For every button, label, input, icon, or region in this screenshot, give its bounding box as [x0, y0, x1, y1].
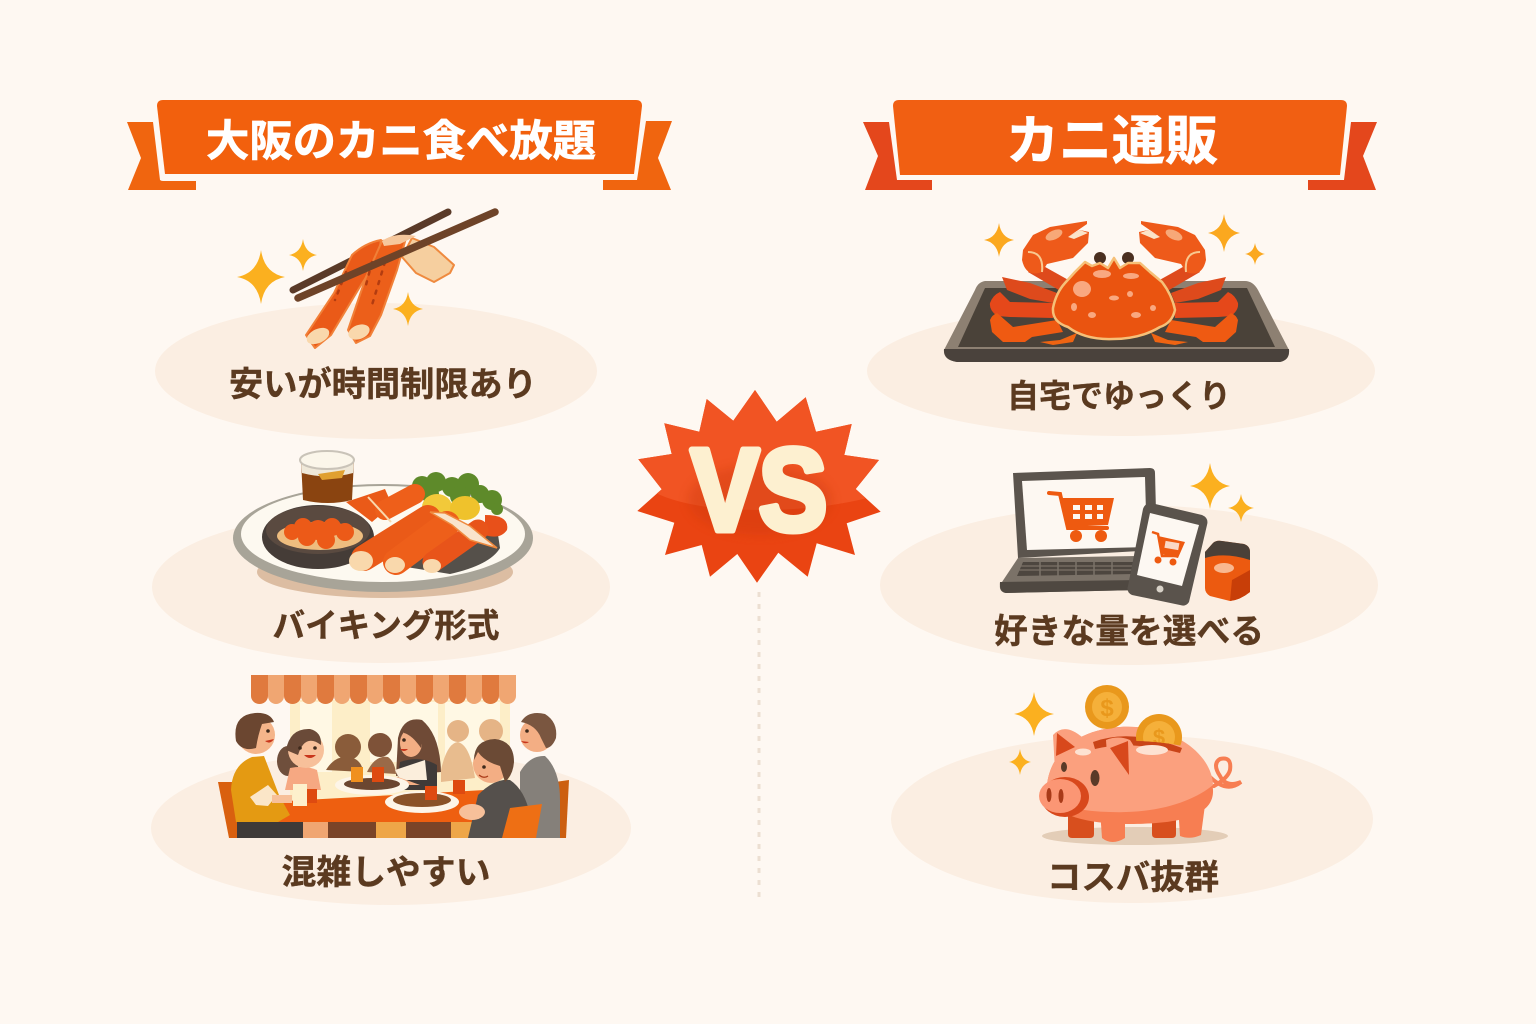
claw: [1022, 221, 1089, 274]
box: [1205, 541, 1250, 601]
icon: sparkles: [1190, 463, 1254, 522]
legs: [1068, 810, 1094, 838]
banner: 大阪のカニ食べ放題: [127, 100, 672, 190]
banner: カニ通販: [863, 100, 1377, 190]
front coin: $: [1100, 695, 1114, 722]
badge: VS burst: [637, 390, 881, 583]
eyes: [1061, 762, 1067, 772]
laptop base: [1000, 556, 1140, 593]
banner title left: 大阪のカニ食べ放題: [206, 118, 596, 166]
backdrop ellipse 6: [891, 735, 1373, 903]
coin in slot: [1136, 714, 1182, 746]
highlights: [1075, 748, 1091, 756]
icon: sparkles: [1009, 692, 1054, 775]
dark tray under legs: [400, 528, 500, 574]
glass: [300, 451, 354, 503]
backdrop ellipse 1: [155, 303, 597, 439]
snout: [1041, 777, 1089, 817]
icon: sparkles: [984, 214, 1265, 265]
under-table stripes: [303, 822, 481, 838]
plates and cups: [293, 767, 465, 813]
man left: [231, 713, 303, 838]
bowl: [262, 505, 374, 569]
left chair: [218, 782, 238, 838]
icon: crab on tray: [944, 221, 1289, 362]
icon: piggy bank with coins: [1039, 685, 1241, 845]
panel: left column, crab buffet: [127, 100, 672, 905]
backdrop ellipse 2: [152, 511, 610, 663]
right back chair: [552, 780, 569, 838]
label: バイキング形式: バイキング形式: [272, 607, 500, 644]
front coin: [1085, 685, 1129, 729]
tray: [944, 281, 1289, 362]
backdrop ellipse 4: [867, 306, 1375, 436]
item: time limited: [155, 212, 597, 439]
label: 自宅でゆっくり: 自宅でゆっくり: [1007, 378, 1231, 414]
front legs: [364, 518, 428, 558]
icon: crab plate with drink: [233, 451, 533, 598]
green garnish: [412, 472, 503, 515]
coin in slot: $: [1153, 725, 1165, 750]
label: コスバ抜群: コスバ抜群: [1047, 859, 1219, 897]
woman centre: [372, 719, 441, 790]
item: relax at home: [867, 214, 1375, 436]
item: choose amount: [880, 463, 1378, 665]
item: crowded: [151, 675, 631, 905]
cart small: [1152, 532, 1185, 566]
ears: [1053, 729, 1083, 770]
slot: [1093, 736, 1182, 753]
left legs and claw: [990, 221, 1089, 345]
label: 混雑しやすい: 混雑しやすい: [282, 854, 490, 892]
divider: dotted vertical line: [758, 592, 760, 900]
lemons: [422, 494, 452, 520]
tail: [1208, 758, 1241, 787]
body: [1047, 727, 1213, 824]
awning: [251, 675, 516, 704]
cart large: [1049, 493, 1114, 542]
laptop screen: [1013, 468, 1157, 558]
girl: [277, 729, 324, 790]
label: 好きな量を選べる: 好きな量を選べる: [994, 613, 1264, 651]
icon: crab legs with chopsticks: [293, 212, 495, 348]
arm: [1028, 263, 1072, 293]
item: buffet style: [152, 451, 610, 663]
right legs and claw, mirrored: [1139, 221, 1238, 345]
chair front: [502, 804, 542, 838]
table: [250, 790, 505, 822]
man front: [459, 739, 530, 838]
backdrop ellipse 3: [151, 751, 631, 905]
VS text: VS: [691, 425, 827, 555]
upper legs: [346, 489, 392, 522]
backdrop ellipse 5: [880, 505, 1378, 665]
shell: [1053, 258, 1175, 339]
label: 安いが時間制限あり: 安いが時間制限あり: [229, 365, 537, 404]
banner title right: カニ通販: [1006, 112, 1218, 171]
item: cost performance: [891, 685, 1373, 903]
phone: [1128, 503, 1207, 606]
eyes: [1094, 252, 1106, 264]
icon: sparkles: [237, 239, 423, 326]
background silhouettes: [326, 719, 503, 782]
icon: crowded restaurant: [218, 675, 569, 838]
windows: [290, 700, 510, 800]
person right: [520, 713, 560, 838]
panel: right column, crab mail order: [863, 100, 1378, 903]
icon: laptop, phone and box: [1000, 468, 1250, 606]
